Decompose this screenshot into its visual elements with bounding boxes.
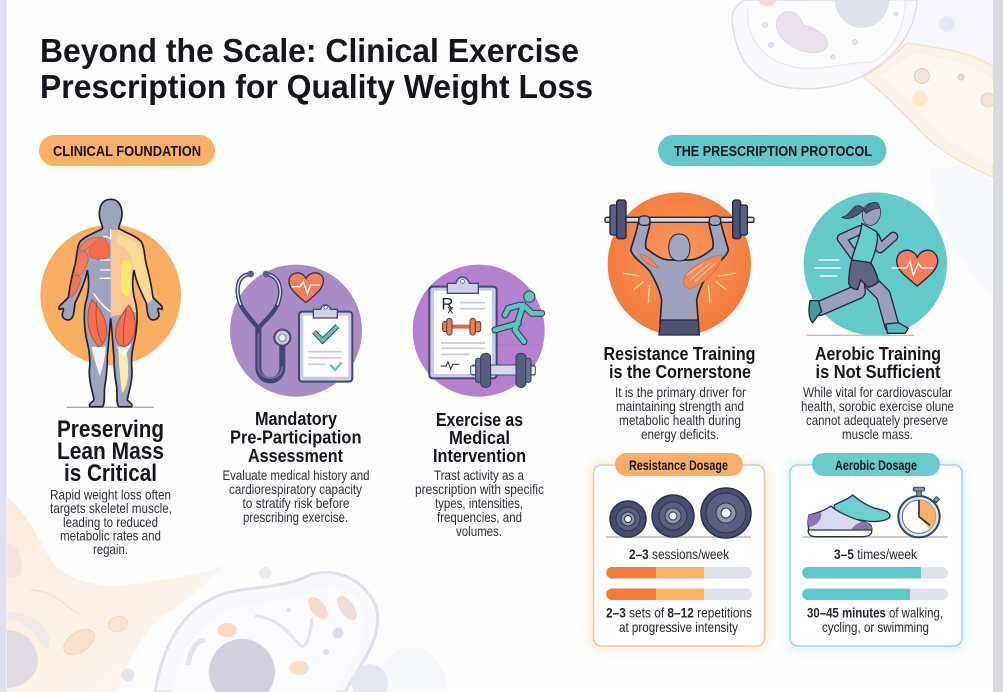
- text: resistance training: maintaining strength and: [616, 398, 744, 414]
- text: preserving lean mass: Preserving: [57, 416, 164, 443]
- icon: prescription clipboard with runner and dumbbell: [413, 265, 545, 397]
- text: mandatory assessment: Mandatory: [255, 408, 338, 429]
- sets text: [606, 604, 752, 635]
- text: aerobic training: cannot adequately preserve: [806, 412, 948, 428]
- section pill: prescription protocol: THE PRESCRIPTION PROTOCOL: [674, 143, 872, 160]
- text: preserving lean mass: Lean Mass: [57, 438, 164, 465]
- text: exercise as medical intervention: Exercise as: [436, 409, 523, 430]
- text: aerobic training: While vital for cardiovascular: [803, 384, 952, 400]
- text: exercise as medical intervention: types, intensities,: [435, 495, 523, 511]
- text: resistance training: [604, 343, 756, 442]
- text: resistance training: Resistance Training: [604, 343, 756, 364]
- text: resistance training: energy deficits.: [641, 426, 719, 442]
- text: preserving lean mass: regain.: [93, 541, 128, 557]
- text: preserving lean mass: metabolic rates and: [60, 528, 161, 544]
- icon: prescription clipboard with runner and dumbbell: R: [441, 294, 453, 313]
- text: exercise as medical intervention: prescription with specific: [415, 481, 544, 497]
- icon: prescription clipboard with runner and dumbbell: x: [447, 302, 453, 316]
- section pill: prescription protocol: [658, 135, 886, 166]
- decoration: top right cell and ribbon: [732, 0, 995, 177]
- text: aerobic training: Aerobic Training: [815, 343, 941, 364]
- icon: aerobic training runner: [804, 192, 947, 336]
- text: mandatory assessment: Pre-Participation: [230, 426, 362, 448]
- bar: times: [802, 567, 948, 578]
- text: preserving lean mass: targets skeletel muscle,: [50, 500, 172, 516]
- sets text: at progressive intensity: [619, 619, 738, 635]
- frequency text: 2–3 sessions/week: [629, 546, 730, 562]
- text: mandatory assessment: to stratify risk before: [242, 495, 350, 511]
- text: preserving lean mass: is Critical: [64, 460, 157, 487]
- icon: weight plates: [606, 488, 751, 538]
- frequency text: 3–5 times/week: [834, 546, 918, 562]
- title: Prescription for Quality Weight Loss: [40, 68, 593, 105]
- text: exercise as medical intervention: [415, 409, 544, 539]
- panel: resistance dosage: [591, 453, 766, 649]
- section pill: clinical foundation: [39, 135, 215, 166]
- text: exercise as medical intervention: Trast activity as a: [434, 467, 524, 483]
- bar: sets: [606, 588, 752, 600]
- dosage pill: resistance: Resistance Dosage: [629, 457, 728, 473]
- icon: stethoscope and clipboard: [230, 265, 362, 397]
- text: exercise as medical intervention: Medical: [449, 427, 510, 448]
- text: aerobic training: [801, 343, 954, 442]
- text: resistance training: is the Cornerstone: [609, 361, 751, 382]
- icon: running shoes and stopwatch: [802, 487, 948, 537]
- panel: aerobic dosage: [788, 453, 964, 649]
- text: exercise as medical intervention: Intervention: [433, 445, 526, 466]
- bar: sessions: [606, 567, 752, 578]
- text: mandatory assessment: prescribing exercise.: [243, 509, 348, 525]
- text: exercise as medical intervention: volumes.: [456, 523, 502, 539]
- text: aerobic training: is Not Sufficient: [816, 361, 940, 382]
- title: Beyond the Scale: Clinical Exercise: [40, 32, 579, 69]
- minutes text: cycling, or swimming: [822, 619, 929, 635]
- bar: minutes: [802, 588, 948, 600]
- text: preserving lean mass: leading to reduced: [63, 514, 158, 530]
- decoration: bottom cell: [155, 572, 448, 692]
- text: mandatory assessment: Assessment: [248, 445, 343, 466]
- text: preserving lean mass: [50, 416, 172, 557]
- text: resistance training: metabolic health during: [619, 412, 741, 428]
- dosage pill: aerobic: Aerobic Dosage: [835, 457, 917, 473]
- dosage pill: aerobic: [812, 453, 940, 476]
- icon: lean mass body figure: [40, 199, 181, 407]
- title: [40, 32, 593, 105]
- text: mandatory assessment: [222, 408, 370, 525]
- minutes text: [807, 604, 943, 635]
- section pill: clinical foundation: CLINICAL FOUNDATION: [53, 143, 201, 160]
- text: preserving lean mass: Rapid weight loss often: [50, 486, 171, 502]
- icon: resistance training lifter: [605, 192, 754, 336]
- dosage pill: resistance: [615, 453, 743, 476]
- text: aerobic training: muscle mass.: [842, 426, 913, 442]
- text: exercise as medical intervention: frequencies, and: [437, 509, 522, 525]
- text: resistance training: It is the primary driver for: [615, 384, 746, 400]
- text: mandatory assessment: Evaluate medical history and: [222, 467, 370, 483]
- minutes text: 30–45 minutes of walking,: [807, 604, 943, 620]
- text: aerobic training: health, sorobic exercise olune: [801, 398, 954, 414]
- sets text: 2–3 sets of 8–12 repetitions: [606, 604, 752, 620]
- decoration: bottom left ribbon: [7, 497, 271, 692]
- text: mandatory assessment: cardiorespiratory capacity: [229, 481, 362, 497]
